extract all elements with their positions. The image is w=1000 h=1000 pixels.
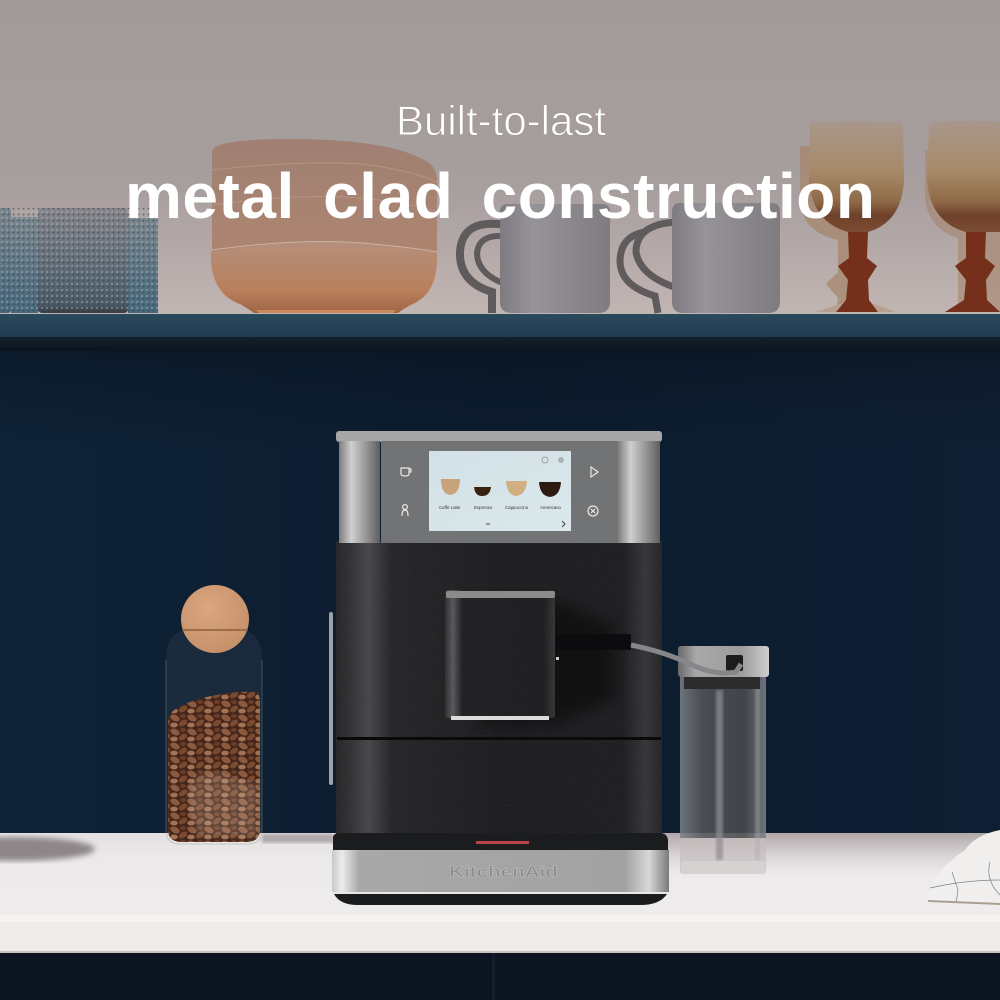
cup labels: Americano <box>540 505 562 510</box>
icon: person button <box>402 505 408 516</box>
cup labels: Caffè Latte <box>439 505 461 510</box>
black body <box>336 541 662 836</box>
cup labels: Cappuccino <box>505 505 529 510</box>
icon: textured blue glasses <box>0 208 158 313</box>
cup labels: Espresso <box>474 505 493 510</box>
touch screen <box>429 451 571 531</box>
icon: cancel button <box>588 506 598 516</box>
cup: caffe latte <box>441 479 460 495</box>
control panel <box>381 441 618 543</box>
cup: espresso <box>474 487 491 496</box>
upper wall background <box>0 0 1000 316</box>
machine side handle <box>329 612 333 785</box>
milk tube <box>631 645 741 673</box>
machine top cap <box>336 431 662 442</box>
coffee machine <box>329 431 669 905</box>
cork ball <box>181 585 249 653</box>
spout unit <box>445 590 631 720</box>
icon: stacked terracotta bowls <box>211 139 437 313</box>
navy lower wall <box>0 350 1000 835</box>
counter top <box>0 833 1000 1000</box>
icon: milk container <box>678 646 769 874</box>
steel right pillar <box>618 441 660 543</box>
wooden shelf <box>0 314 1000 351</box>
subtitle: Built-to-last: Built-to-last <box>396 97 606 144</box>
icon: coffee bean jar with cork stopper <box>166 585 262 844</box>
base tray <box>332 833 669 905</box>
cup labels <box>439 505 562 510</box>
steel left pillar <box>339 441 380 543</box>
icon: amber goblet pair right <box>925 121 1000 312</box>
cup: americano <box>539 482 561 497</box>
icon: play button <box>591 467 598 477</box>
cup: cappuccino <box>506 481 527 496</box>
title <box>125 97 875 232</box>
icon: grey mug left <box>460 204 610 313</box>
icon: grey mug right <box>620 203 780 313</box>
icon: folded checked towel <box>927 830 1000 906</box>
icon: amber goblet pair centre <box>800 122 904 312</box>
KitchenAid logo: KitchenAid <box>449 864 558 881</box>
icon: cup button <box>401 468 411 476</box>
headline: metal clad construction: metal clad construction <box>125 160 875 232</box>
